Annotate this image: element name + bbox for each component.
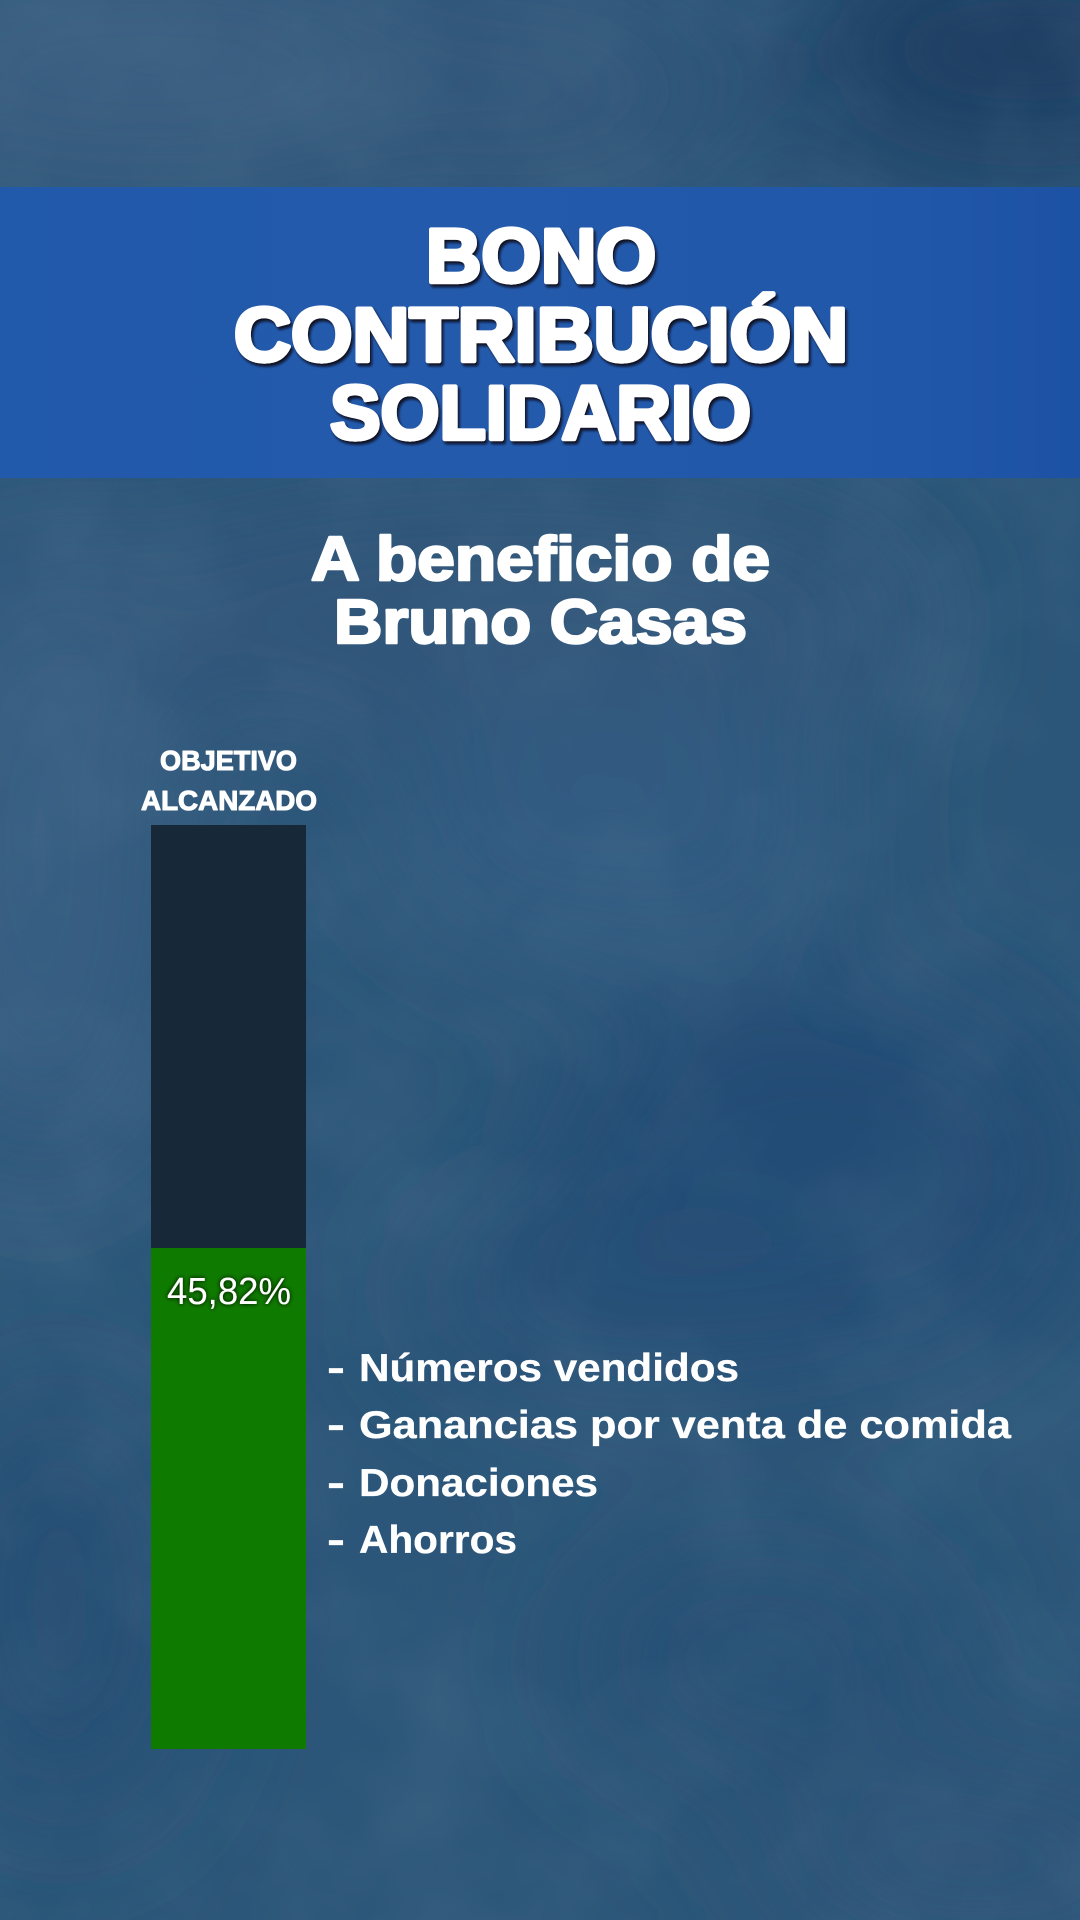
- subtitle: [311, 525, 770, 657]
- remaining track: [151, 825, 306, 1248]
- funding sources list: Ahorros: [359, 1519, 517, 1562]
- title band: [0, 187, 1080, 478]
- title: CONTRIBUCIÓN: [234, 293, 848, 378]
- subtitle: Bruno Casas: [334, 588, 747, 657]
- title: [234, 214, 848, 456]
- title: BONO: [426, 214, 656, 299]
- progress bar: [151, 825, 306, 1749]
- funding sources list: Donaciones: [359, 1462, 598, 1505]
- funding sources list: -: [327, 1347, 345, 1390]
- funding sources list: Números vendidos: [359, 1347, 739, 1390]
- funding sources list: [327, 1347, 1011, 1562]
- percentage value: 45,82%: [167, 1271, 291, 1313]
- progress bar label: [141, 745, 317, 816]
- title: SOLIDARIO: [330, 371, 751, 456]
- funding sources list: -: [327, 1462, 345, 1505]
- funding sources list: Ganancias por venta de comida: [359, 1404, 1011, 1447]
- progress bar label: ALCANZADO: [141, 785, 317, 816]
- progress bar label: OBJETIVO: [160, 745, 297, 776]
- funding sources list: -: [327, 1404, 345, 1447]
- subtitle: A beneficio de: [311, 525, 770, 594]
- filled portion: [151, 1248, 306, 1749]
- funding sources list: -: [327, 1519, 345, 1562]
